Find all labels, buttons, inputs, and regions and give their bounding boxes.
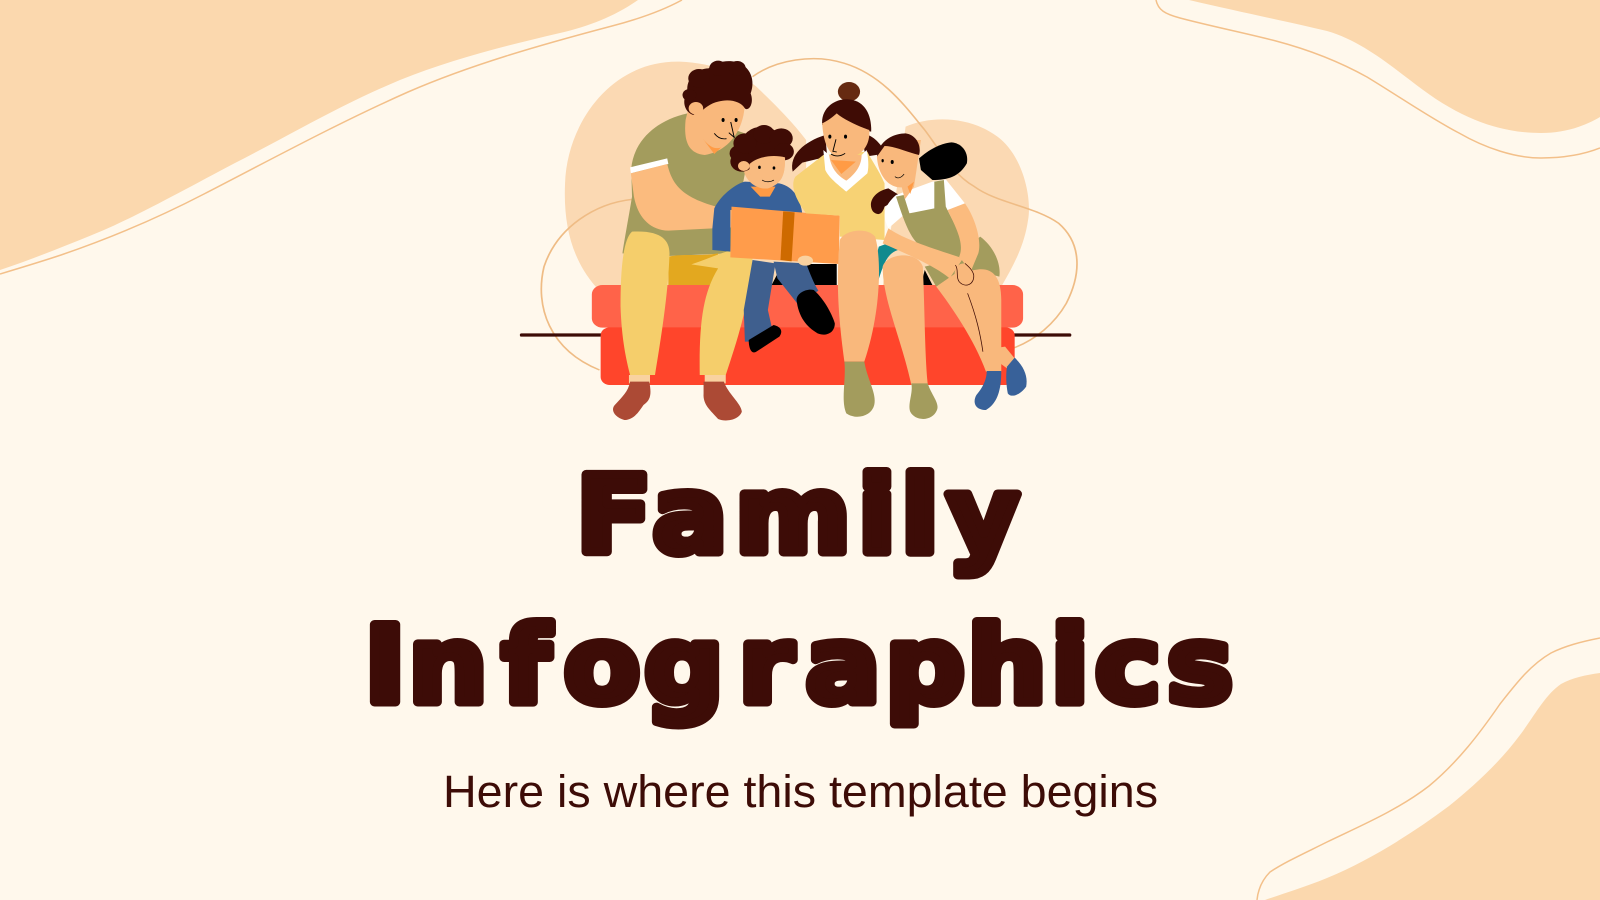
son — [712, 125, 835, 352]
sofa — [592, 264, 1023, 385]
daughter — [871, 133, 1027, 410]
bottom-right peach blob — [1265, 673, 1600, 900]
top-right contour line — [1156, 0, 1600, 158]
illustration: family on sofa — [520, 59, 1077, 420]
top-left peach blob — [0, 0, 638, 270]
title: Family — [576, 453, 1019, 577]
title: Infographics — [364, 603, 1233, 727]
bottom-right contour line — [1257, 638, 1600, 900]
contour lines behind figures — [541, 59, 1077, 370]
subtitle: Here is where this template begins — [443, 766, 1158, 817]
open book — [730, 207, 840, 266]
father — [613, 61, 753, 420]
backdrop blobs — [565, 62, 1029, 287]
mother — [792, 82, 938, 419]
top-right peach blob — [1189, 0, 1600, 133]
top-left contour line — [0, 0, 682, 274]
ground line — [520, 333, 1071, 337]
